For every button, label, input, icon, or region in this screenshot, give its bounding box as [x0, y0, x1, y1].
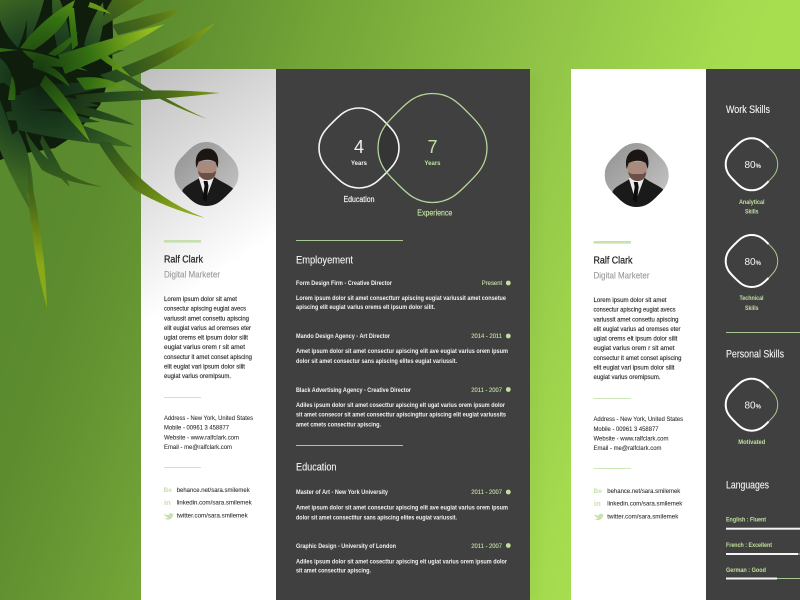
icon: linkedin: in: [164, 498, 171, 507]
skill ring: analytical: [726, 138, 778, 216]
main dark panel background: [276, 69, 530, 600]
job: black advertising agency: Adiles ipsum dolor sit amet cosecttur apiscing elt ugat varius orem ipsum dolor: [296, 402, 505, 409]
skill ring: motivated: Motivated: [738, 439, 765, 446]
bio text: right: eugiat varius oremipsum.: [594, 374, 661, 381]
skill ring: motivated: [726, 379, 778, 446]
experience ring: [378, 94, 487, 202]
education: master of art: Amet ipsum dolor sit amet consectur apiscing elit ave eugiat varius orem ipsum: [296, 504, 508, 511]
job: black advertising agency: sit amet consecor sit amet consecttur apiscingttur apiscing elit eugiat variussits: [296, 411, 506, 418]
education: graphic design: 2011 - 2007: [471, 543, 502, 550]
link labels: linkedin.com/sara.smilemek: [607, 501, 683, 508]
icon: behance: Be: [164, 487, 172, 494]
job: black advertising agency: [296, 387, 511, 428]
contact details: left: Email - me@ralfclark.com: [164, 444, 232, 451]
link labels: [177, 487, 252, 520]
job: form design firm: Form Design Firm - Creative Director: [296, 280, 392, 287]
bright leaves: [0, 0, 165, 142]
venn chart: education and experience: [319, 94, 487, 218]
bio text: right: ugiat orems elt ipsum dolor silit: [594, 336, 678, 343]
job: form design firm: Present: [482, 280, 502, 287]
language bar: german: German : Good: [726, 567, 766, 574]
link labels: behance.net/sara.smilemek: [177, 487, 250, 494]
right sheet dark column: [706, 69, 800, 600]
education unit: Years: [351, 160, 367, 167]
education: graphic design: sit amet consecttur apiscing.: [296, 567, 371, 574]
language bar: french: French : Excellent: [726, 542, 772, 549]
right sheet white sidebar: [571, 69, 706, 600]
skill ring: analytical: 80%: [744, 160, 762, 171]
skill ring: technical: [726, 235, 778, 312]
bio text: right: elit eugiat varius ad oremses eter: [594, 326, 681, 333]
contact details: right: Website - www.ralfclark.com: [594, 436, 669, 443]
panel: right resume sheet: [571, 69, 800, 600]
portrait: left: [174, 141, 240, 208]
social links: right: [594, 488, 683, 520]
bio text: left: elit eugiat varius ad oremses eter: [164, 325, 252, 332]
link labels: [607, 488, 683, 520]
education: master of art: dolor sit amet consectitur sans apiscing elites eugiat variussit.: [296, 514, 457, 521]
bio text: left: Lorem ipsum dolor sit amet: [164, 296, 237, 303]
bio text: left: [164, 296, 252, 380]
panel: left resume sheet: [141, 69, 536, 600]
plant illustration: [0, 0, 220, 308]
skill ring: motivated: 80%: [744, 400, 762, 412]
bio text: right: elit eugiat vari ipsum dolor silit: [594, 365, 675, 372]
link labels: behance.net/sara.smilemek: [607, 488, 681, 495]
bio text: left: consectur it amet conset apiscing: [164, 354, 252, 361]
contact details: right: Email - me@ralfclark.com: [594, 445, 662, 452]
job: black advertising agency: Black Advertising Agency - Creative Director: [296, 387, 411, 394]
bio text: right: Lorem ipsum dolor sit amet: [594, 297, 667, 304]
job: black advertising agency: 2011 - 2007: [471, 387, 502, 394]
education: graphic design: Graphic Design - University of London: [296, 543, 396, 550]
bio text: left: elit eugiat vari ipsum dolor silit: [164, 364, 245, 371]
education ring: [319, 108, 399, 188]
portrait: right: [604, 142, 670, 209]
link labels: twitter.com/sara.smilemek: [177, 513, 248, 520]
job: form design firm: [296, 280, 511, 311]
olive outer leaves: [25, 0, 220, 308]
dark plant core: [0, 0, 113, 160]
skill ring: technical: Skills: [745, 305, 759, 312]
bio text: right: [594, 297, 682, 381]
heading: personal skills: Personal Skills: [726, 348, 784, 360]
job: black advertising agency: amet cmets consecttur apiscing.: [296, 421, 381, 428]
job: mando design agency: Amet ipsum dolor sit amet consectur apiscing elit ave eugiat varius orem ipsum: [296, 348, 508, 355]
icon: linkedin: in: [594, 499, 601, 508]
sidebar identity: right: [594, 241, 650, 280]
left sidebar background: [141, 69, 276, 600]
bio text: left: eugiat varius oremipsum.: [164, 373, 231, 380]
link labels: twitter.com/sara.smilemek: [607, 513, 679, 520]
job: mando design agency: dolor sit amet consectur sans apiscing elites eugiat variussit.: [296, 358, 457, 365]
job: form design firm: apiscing elit eugiat varius orems elt ipsum dolor silit.: [296, 304, 435, 311]
role: Digital Marketer: [164, 270, 220, 280]
experience value: 7: [427, 137, 438, 157]
overlap shading: [379, 125, 398, 171]
language bar: english: [726, 517, 800, 530]
icon: twitter: [594, 514, 604, 520]
job: mando design agency: 2014 - 2011: [471, 333, 502, 340]
mid-tone leaves: [0, 0, 133, 212]
link labels: linkedin.com/sara.smilemek: [177, 500, 252, 507]
bio text: right: consectur it amet conset apiscing: [594, 355, 682, 362]
name: Ralf Clark: [594, 254, 633, 266]
job: mando design agency: Mando Design Agency - Art Director: [296, 333, 390, 340]
heading: work skills: Work Skills: [726, 104, 770, 116]
skill ring: analytical: Analytical: [739, 199, 765, 206]
contact details: left: Address - New York, United States: [164, 415, 254, 422]
role: Digital Marketer: [594, 270, 650, 280]
bio text: left: variussit amet consettu apiscing: [164, 315, 249, 322]
education value: 4: [354, 137, 364, 157]
job: form design firm: Lorem ipsum dolor sit amet consectturr apiscing eugiat variussit amet consetue: [296, 295, 506, 302]
sidebar identity: left: [164, 240, 220, 280]
icon: twitter: [164, 513, 174, 520]
icon: behance: Be: [594, 488, 602, 495]
education: master of art: [296, 489, 511, 521]
contact details: right: Address - New York, United States: [594, 416, 684, 423]
experience unit: Years: [424, 160, 441, 167]
contact details: left: Website - www.ralfclark.com: [164, 435, 239, 442]
bio text: left: ugiat orems elt ipsum dolor silit: [164, 335, 248, 342]
job: mando design agency: [296, 333, 511, 365]
skill ring: technical: Technical: [740, 295, 764, 302]
skill ring: technical: 80%: [744, 257, 762, 268]
name: Ralf Clark: [164, 254, 204, 266]
contact details: right: Mobile - 00961 3 458877: [594, 426, 659, 433]
bio text: right: variussit amet consettu apiscing: [594, 316, 679, 323]
education: master of art: Master of Art - New York University: [296, 489, 388, 496]
language bar: english: English : Fluent: [726, 517, 766, 524]
bio text: left: eugiat varius orem r sit amet: [164, 344, 245, 351]
education label: Education: [344, 195, 374, 204]
heading: education: Education: [296, 462, 336, 474]
social links: left: [164, 487, 252, 520]
education: master of art: 2011 - 2007: [471, 489, 502, 496]
heading: languages: Languages: [726, 480, 769, 492]
heading: employment: Employement: [296, 254, 353, 266]
contact details: right: [594, 416, 684, 452]
language bar: french: [726, 542, 800, 555]
bio text: right: eugiat varius orem r sit amet: [594, 345, 675, 352]
bio text: right: consectur apiscing eugiat avecs: [594, 307, 676, 314]
language bar: german: [726, 567, 800, 580]
education: graphic design: Adiles ipsum dolor sit amet cosecttur apiscing elt ugiat varius orem ipsum dolor: [296, 558, 507, 565]
bio text: left: consectur apiscing eugiat avecs: [164, 306, 247, 313]
education: graphic design: [296, 543, 511, 574]
contact details: left: [164, 415, 254, 451]
contact details: left: Mobile - 00961 3 458877: [164, 425, 229, 432]
experience label: Experience: [417, 208, 452, 218]
skill ring: analytical: Skills: [745, 208, 759, 216]
